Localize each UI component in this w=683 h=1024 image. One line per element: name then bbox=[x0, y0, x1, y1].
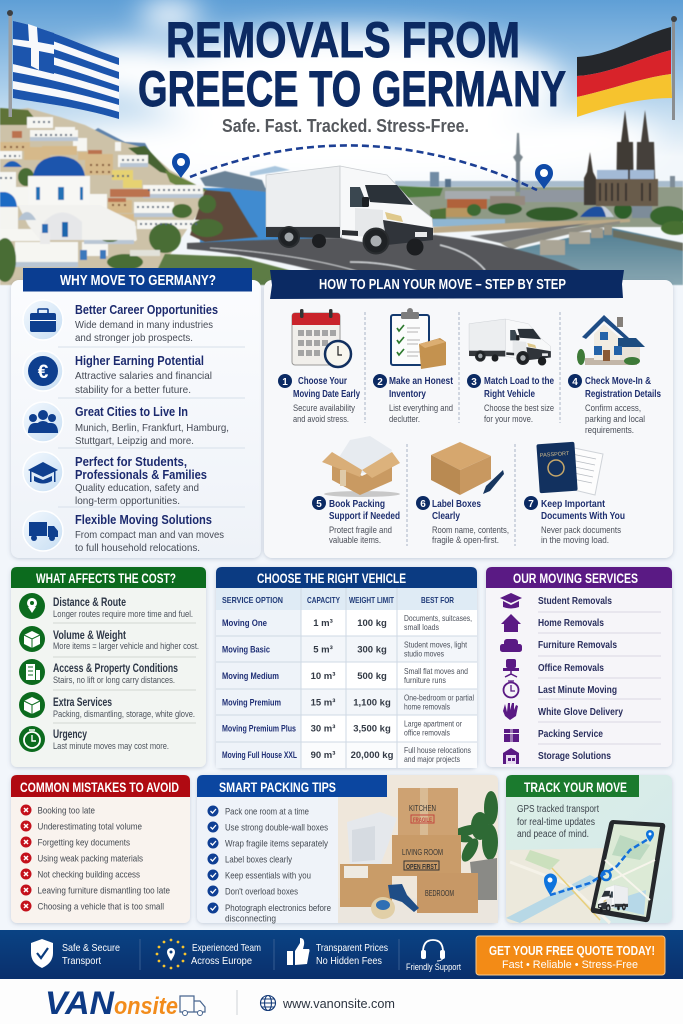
step 4: requirements. bbox=[585, 425, 634, 435]
service: storage bbox=[503, 748, 611, 764]
box kitchen: KITCHEN bbox=[409, 804, 436, 813]
icon: open box with bubble wrap bbox=[322, 436, 400, 497]
step 1: Choose Your bbox=[298, 375, 347, 387]
icon: passport and documents: PASSPORT bbox=[540, 451, 570, 459]
mistake list: Forgetting key documents bbox=[38, 838, 130, 848]
row: moving one: small loads bbox=[404, 623, 439, 632]
tv tower bbox=[513, 133, 523, 192]
step 5: Support if Needed bbox=[329, 510, 400, 522]
row: moving medium: Moving Medium bbox=[222, 671, 279, 681]
moving van bbox=[266, 166, 433, 256]
item: distance: Longer routes require more time and fuel. bbox=[53, 609, 193, 619]
mistake list: Booking too late bbox=[38, 806, 95, 816]
number 3: 3 bbox=[471, 377, 477, 388]
item: urgency: Last minute moves may cost more. bbox=[53, 741, 169, 751]
row: moving premium: 1,100 kg bbox=[353, 698, 391, 708]
service: storage: Storage Solutions bbox=[538, 750, 611, 762]
heading: step by step: HOW TO PLAN YOUR MOVE – STEP BY STEP bbox=[319, 277, 566, 293]
friendly support: Friendly Support bbox=[406, 962, 461, 972]
step 1: Secure availability bbox=[293, 403, 355, 413]
heading: services bbox=[486, 567, 672, 588]
step 3: Match Load to the bbox=[484, 375, 554, 387]
box bedroom bbox=[417, 873, 478, 913]
item: extras: Packing, dismantling, storage, white glove. bbox=[53, 709, 195, 719]
heading: packing tips: SMART PACKING TIPS bbox=[219, 780, 336, 795]
heading: packing tips bbox=[197, 775, 387, 797]
heading: vehicle bbox=[216, 567, 477, 588]
service: packing bbox=[504, 727, 603, 742]
icon: map pin bbox=[544, 874, 557, 895]
item: extras: Extra Services bbox=[53, 697, 112, 709]
cologne city bbox=[395, 186, 683, 235]
item: urgency bbox=[19, 726, 169, 752]
item: access: Stairs, no lift or long carry distances. bbox=[53, 675, 175, 685]
service: student bbox=[500, 593, 612, 608]
flag: germany bbox=[577, 16, 677, 120]
item: flexible bbox=[23, 511, 224, 554]
service: furniture: Furniture Removals bbox=[538, 639, 617, 651]
heading: mistakes bbox=[11, 775, 190, 797]
item: volume bbox=[19, 626, 199, 652]
step 3: Right Vehicle bbox=[484, 388, 535, 400]
service: last minute: Last Minute Moving bbox=[538, 684, 617, 696]
tips list bbox=[208, 806, 331, 924]
item: access: Access & Property Conditions bbox=[53, 663, 178, 675]
step 6: Clearly bbox=[432, 510, 460, 522]
footer bbox=[0, 979, 683, 1024]
row: moving full house: and major projects bbox=[404, 755, 460, 764]
step 2 bbox=[373, 308, 453, 424]
heading: step by step bbox=[270, 270, 624, 299]
icon: labelled box and marker bbox=[431, 442, 504, 495]
table header: CAPACITY bbox=[307, 595, 340, 605]
safe and secure: Transport bbox=[62, 955, 101, 967]
icon: calendar bbox=[292, 309, 351, 367]
row: moving medium: Small flat moves and bbox=[404, 667, 468, 676]
photo: moving boxes bbox=[338, 775, 498, 923]
logo: vanonsite: onsite bbox=[114, 993, 178, 1020]
mistake list: Not checking building access bbox=[38, 870, 140, 880]
phone with map bbox=[591, 820, 665, 922]
row: moving full house: Moving Full House XXL bbox=[222, 750, 297, 760]
transparent prices: No Hidden Fees bbox=[316, 955, 382, 967]
item: cities: Munich, Berlin, Frankfurt, Hamburg, bbox=[75, 422, 229, 434]
row: moving basic: studio moves bbox=[404, 650, 444, 658]
service: furniture bbox=[500, 639, 617, 652]
step 1 bbox=[278, 309, 360, 424]
row: moving premium plus bbox=[222, 720, 462, 738]
heading: why move bbox=[23, 268, 252, 292]
item: volume: Volume & Weight bbox=[53, 630, 126, 642]
row: moving premium: home removals bbox=[404, 702, 450, 712]
item: access bbox=[19, 659, 178, 685]
step 1: and avoid stress. bbox=[293, 414, 349, 424]
row: moving medium: furniture runs bbox=[404, 676, 446, 685]
tagline: Safe. Fast. Tracked. Stress-Free. bbox=[222, 116, 469, 136]
step 2: Inventory bbox=[389, 388, 426, 400]
item: extras bbox=[19, 692, 195, 719]
row: moving one: 100 kg bbox=[357, 618, 387, 629]
item: career: Wide demand in many industries bbox=[75, 319, 213, 331]
item: earnings: stability for a better future. bbox=[75, 384, 191, 396]
step 3 bbox=[467, 319, 554, 424]
mistake list: Choosing a vehicle that is too small bbox=[38, 902, 164, 912]
icon: phone pin bbox=[646, 830, 654, 842]
item: career: and stronger job prospects. bbox=[75, 332, 193, 344]
number 1: 1 bbox=[282, 377, 288, 388]
packing tape bbox=[371, 884, 419, 919]
service: home: Home Removals bbox=[538, 617, 604, 629]
row: moving full house: 90 m³ bbox=[311, 750, 335, 761]
road bbox=[150, 235, 585, 285]
step 4 bbox=[568, 315, 661, 435]
row: moving premium plus: office removals bbox=[404, 728, 450, 738]
panel: how to plan your move bbox=[264, 270, 673, 558]
heading: track bbox=[506, 775, 639, 797]
box bedroom: BEDROOM bbox=[425, 889, 454, 898]
row: moving premium bbox=[222, 694, 474, 712]
panel: track your move bbox=[506, 775, 672, 923]
item: distance bbox=[19, 593, 193, 619]
service: office: Office Removals bbox=[538, 662, 604, 674]
transparent prices bbox=[287, 938, 388, 967]
step 7: Never pack documents bbox=[541, 525, 621, 535]
panel: smart packing tips bbox=[197, 775, 498, 924]
flag: greece bbox=[7, 10, 119, 119]
service: white glove bbox=[503, 703, 623, 720]
logo: vanonsite: VAN bbox=[45, 985, 115, 1021]
track description bbox=[517, 804, 599, 840]
item: earnings: € bbox=[38, 362, 49, 383]
clouds behind title bbox=[50, 1, 660, 180]
step 5 bbox=[312, 436, 400, 545]
row: moving basic: Student moves, light bbox=[404, 640, 468, 650]
box kitchen bbox=[398, 788, 458, 835]
number 6: 6 bbox=[420, 499, 426, 510]
item: students: Quality education, safety and bbox=[75, 482, 199, 494]
row: moving one: Documents, suitcases, bbox=[404, 614, 472, 623]
tips list: Wrap fragile items separately bbox=[225, 838, 328, 850]
track description: and peace of mind. bbox=[517, 829, 589, 840]
step 3: for your move. bbox=[484, 414, 533, 424]
item: students bbox=[23, 452, 207, 507]
step 5: valuable items. bbox=[329, 535, 381, 545]
call to action: Fast • Reliable • Stress-Free bbox=[502, 959, 638, 971]
service: student: Student Removals bbox=[538, 595, 612, 607]
step 2: Make an Honest bbox=[389, 375, 453, 387]
item: students: Perfect for Students, bbox=[75, 455, 187, 469]
plant bbox=[448, 791, 498, 864]
logo: vanonsite bbox=[45, 985, 205, 1021]
icon: house bbox=[577, 315, 645, 365]
title bbox=[138, 12, 566, 117]
panel: why move to germany bbox=[11, 268, 261, 558]
box living room: LIVING ROOM bbox=[402, 848, 443, 857]
item: flexible: to full household relocations. bbox=[75, 542, 200, 554]
number 2: 2 bbox=[377, 377, 383, 388]
step 4: Check Move-In & bbox=[585, 375, 651, 387]
item: career: Better Career Opportunities bbox=[75, 303, 218, 317]
number 7: 7 bbox=[528, 499, 534, 510]
tips list: Pack one room at a time bbox=[225, 806, 309, 818]
row: moving premium: One-bedroom or partial bbox=[404, 694, 474, 702]
service: white glove: White Glove Delivery bbox=[538, 706, 623, 718]
panel: what affects the cost bbox=[11, 567, 206, 767]
mistake list: Underestimating total volume bbox=[38, 822, 142, 832]
service: home bbox=[501, 614, 604, 632]
table header bbox=[216, 588, 477, 610]
experienced team bbox=[156, 939, 261, 969]
heading: mistakes: COMMON MISTAKES TO AVOID bbox=[20, 780, 179, 795]
row: moving one: Moving One bbox=[222, 618, 267, 628]
row: moving premium: Moving Premium bbox=[222, 698, 281, 708]
step 6: Label Boxes bbox=[432, 498, 481, 510]
mistake list bbox=[20, 804, 170, 912]
river and bridge bbox=[433, 219, 683, 285]
box kitchen: FRAGILE bbox=[413, 818, 432, 824]
safe and secure: Safe & Secure bbox=[62, 942, 120, 954]
table header: WEIGHT LIMIT bbox=[349, 595, 395, 605]
trust bar bbox=[0, 930, 683, 979]
step 1: Moving Date Early bbox=[293, 388, 360, 400]
call to action bbox=[476, 936, 665, 975]
cologne cathedral bbox=[584, 110, 658, 206]
item: cities: Stuttgart, Leipzig and more. bbox=[75, 435, 194, 447]
icon: globe bbox=[260, 996, 276, 1010]
row: moving basic: 5 m³ bbox=[313, 644, 333, 656]
hero banner bbox=[0, 0, 683, 285]
service: packing: Packing Service bbox=[538, 728, 603, 740]
icon: clipboard and box bbox=[391, 308, 446, 369]
santorini village bbox=[0, 108, 258, 285]
row: moving full house bbox=[222, 746, 471, 764]
van on phone bbox=[598, 885, 628, 913]
item: earnings: Attractive salaries and financial bbox=[75, 370, 212, 382]
service: office bbox=[503, 659, 604, 677]
item: students: Professionals & Families bbox=[75, 468, 207, 482]
track description: for real-time updates bbox=[517, 817, 595, 828]
step 6: fragile & open-first. bbox=[432, 535, 499, 545]
heading: cost bbox=[11, 567, 206, 588]
row: moving basic: 300 kg bbox=[357, 644, 387, 656]
step 4: parking and local bbox=[585, 414, 645, 424]
row: moving basic: Moving Basic bbox=[222, 644, 270, 654]
tips list: Use strong double-wall boxes bbox=[225, 822, 328, 834]
item: flexible: Flexible Moving Solutions bbox=[75, 513, 212, 527]
item: volume: More items = larger vehicle and higher cost. bbox=[53, 641, 199, 651]
number 5: 5 bbox=[316, 499, 322, 510]
number 4: 4 bbox=[572, 377, 578, 388]
item: earnings bbox=[23, 351, 212, 396]
heading: vehicle: CHOOSE THE RIGHT VEHICLE bbox=[257, 571, 406, 586]
row: moving full house: Full house relocations bbox=[404, 746, 471, 755]
row: moving premium plus: Moving Premium Plus bbox=[222, 724, 296, 734]
row: moving premium plus: Large apartment or bbox=[404, 720, 462, 728]
row: moving full house: 20,000 kg bbox=[351, 750, 394, 761]
icon: origin pin bbox=[172, 153, 190, 178]
mistake list: Leaving furniture dismantling too late bbox=[38, 886, 170, 896]
step 2: declutter. bbox=[389, 414, 420, 424]
row: moving premium plus: 3,500 kg bbox=[353, 724, 391, 734]
gps route bbox=[550, 838, 650, 895]
item: earnings: Higher Earning Potential bbox=[75, 354, 204, 368]
panel: vehicle table bbox=[216, 567, 477, 768]
transparent prices: Transparent Prices bbox=[316, 942, 388, 954]
step 7: Keep Important bbox=[541, 498, 605, 510]
step 6: Room name, contents, bbox=[432, 525, 509, 535]
tips list: Keep essentials with you bbox=[225, 870, 311, 882]
tips list: disconnecting bbox=[225, 914, 276, 924]
experienced team: Across Europe bbox=[191, 955, 252, 967]
step 6 bbox=[416, 442, 509, 545]
item: flexible: From compact man and van moves bbox=[75, 529, 224, 541]
step 3: Choose the best size bbox=[484, 403, 554, 413]
safe and secure bbox=[31, 939, 120, 968]
row: moving medium bbox=[222, 667, 468, 685]
step 7 bbox=[524, 442, 625, 545]
step 7: in the moving load. bbox=[541, 535, 609, 545]
tips list: Photograph electronics before bbox=[225, 903, 331, 914]
icon: van bbox=[469, 319, 551, 366]
track description: GPS tracked transport bbox=[517, 804, 599, 815]
icon: destination pin bbox=[535, 164, 553, 189]
distant hills and sea bbox=[78, 128, 683, 248]
white church with blue dome bbox=[0, 156, 137, 244]
heading: track: TRACK YOUR MOVE bbox=[524, 780, 627, 795]
panel: common mistakes bbox=[11, 775, 190, 923]
experienced team: Experienced Team bbox=[192, 942, 261, 954]
item: students: long-term opportunities. bbox=[75, 495, 180, 507]
row: moving premium plus: 30 m³ bbox=[311, 724, 335, 734]
mistake list: Using weak packing materials bbox=[38, 854, 143, 864]
heading: services: OUR MOVING SERVICES bbox=[513, 571, 638, 586]
box living room bbox=[392, 835, 461, 876]
tips list: Label boxes clearly bbox=[225, 854, 292, 866]
map bbox=[506, 848, 613, 923]
heading: cost: WHAT AFFECTS THE COST? bbox=[36, 571, 176, 586]
step 4: Registration Details bbox=[585, 388, 661, 400]
step 7: Documents With You bbox=[541, 510, 625, 522]
bubble wrap bbox=[347, 812, 397, 866]
box left bbox=[340, 864, 392, 907]
website: www.vanonsite.com bbox=[282, 996, 395, 1011]
item: cities bbox=[23, 402, 229, 447]
heading: why move: WHY MOVE TO GERMANY? bbox=[60, 273, 216, 289]
box living room: OPEN FIRST bbox=[406, 864, 438, 871]
step 5: Protect fragile and bbox=[329, 525, 392, 535]
tips list: Don't overload boxes bbox=[225, 886, 298, 898]
panel: our moving services bbox=[486, 567, 672, 767]
row: moving one bbox=[222, 614, 472, 632]
table header: SERVICE OPTION bbox=[222, 595, 283, 605]
item: career bbox=[23, 300, 218, 344]
item: cities: Great Cities to Live In bbox=[75, 405, 188, 419]
table header: BEST FOR bbox=[421, 595, 454, 605]
item: urgency: Urgency bbox=[53, 729, 87, 741]
service: last minute bbox=[504, 681, 617, 698]
row: moving medium: 500 kg bbox=[357, 671, 387, 682]
row: moving one: 1 m³ bbox=[313, 618, 333, 629]
row: moving medium: 10 m³ bbox=[311, 671, 335, 682]
route line bbox=[190, 145, 537, 190]
step 4: Confirm access, bbox=[585, 403, 641, 413]
step 2: List everything and bbox=[389, 403, 453, 413]
friendly support bbox=[406, 940, 461, 972]
row: moving basic bbox=[222, 640, 468, 658]
step 5: Book Packing bbox=[329, 498, 385, 510]
row: moving premium: 15 m³ bbox=[311, 698, 335, 708]
item: distance: Distance & Route bbox=[53, 597, 126, 609]
title: REMOVALS FROM bbox=[166, 12, 520, 68]
